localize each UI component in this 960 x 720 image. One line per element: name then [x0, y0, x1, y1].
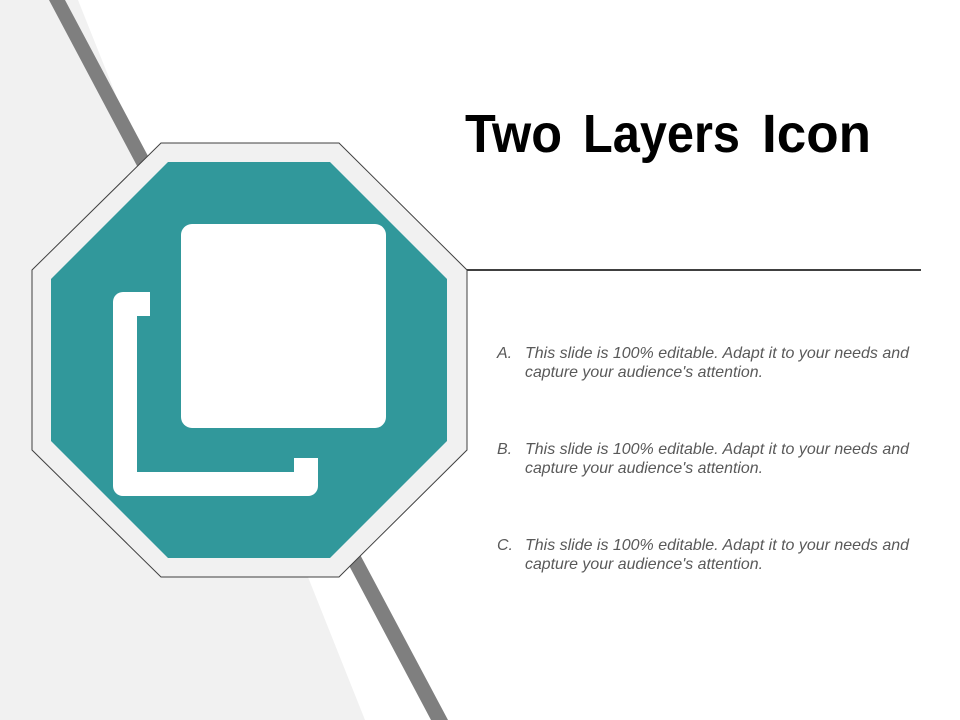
back layer bracket	[113, 292, 318, 496]
octagon teal fill	[51, 162, 447, 558]
octagon badge	[32, 143, 467, 577]
background panel: grey diagonal	[0, 0, 365, 720]
text block C: capture your audience's attention.	[525, 556, 763, 573]
title: Two	[465, 104, 562, 164]
octagon outer frame	[32, 143, 467, 577]
text block B: This slide is 100% editable. Adapt it to your needs and	[525, 441, 910, 458]
text block C: This slide is 100% editable. Adapt it to your needs and	[525, 537, 910, 554]
divider line	[467, 269, 921, 271]
front layer square	[181, 224, 386, 428]
text block A: This slide is 100% editable. Adapt it to your needs and	[525, 345, 910, 362]
diagonal grey bar	[49, 0, 448, 720]
text block A: capture your audience's attention.	[525, 364, 763, 381]
text block B: B.	[497, 441, 512, 458]
title: Layers	[583, 104, 740, 164]
text block B	[497, 441, 910, 477]
text block C	[497, 537, 910, 573]
text block C: C.	[497, 537, 513, 554]
icon: two layers	[113, 224, 386, 496]
title: Icon	[762, 104, 871, 164]
title	[465, 104, 871, 164]
text block A: A.	[496, 345, 512, 362]
text block A	[496, 345, 910, 381]
text block B: capture your audience's attention.	[525, 460, 763, 477]
